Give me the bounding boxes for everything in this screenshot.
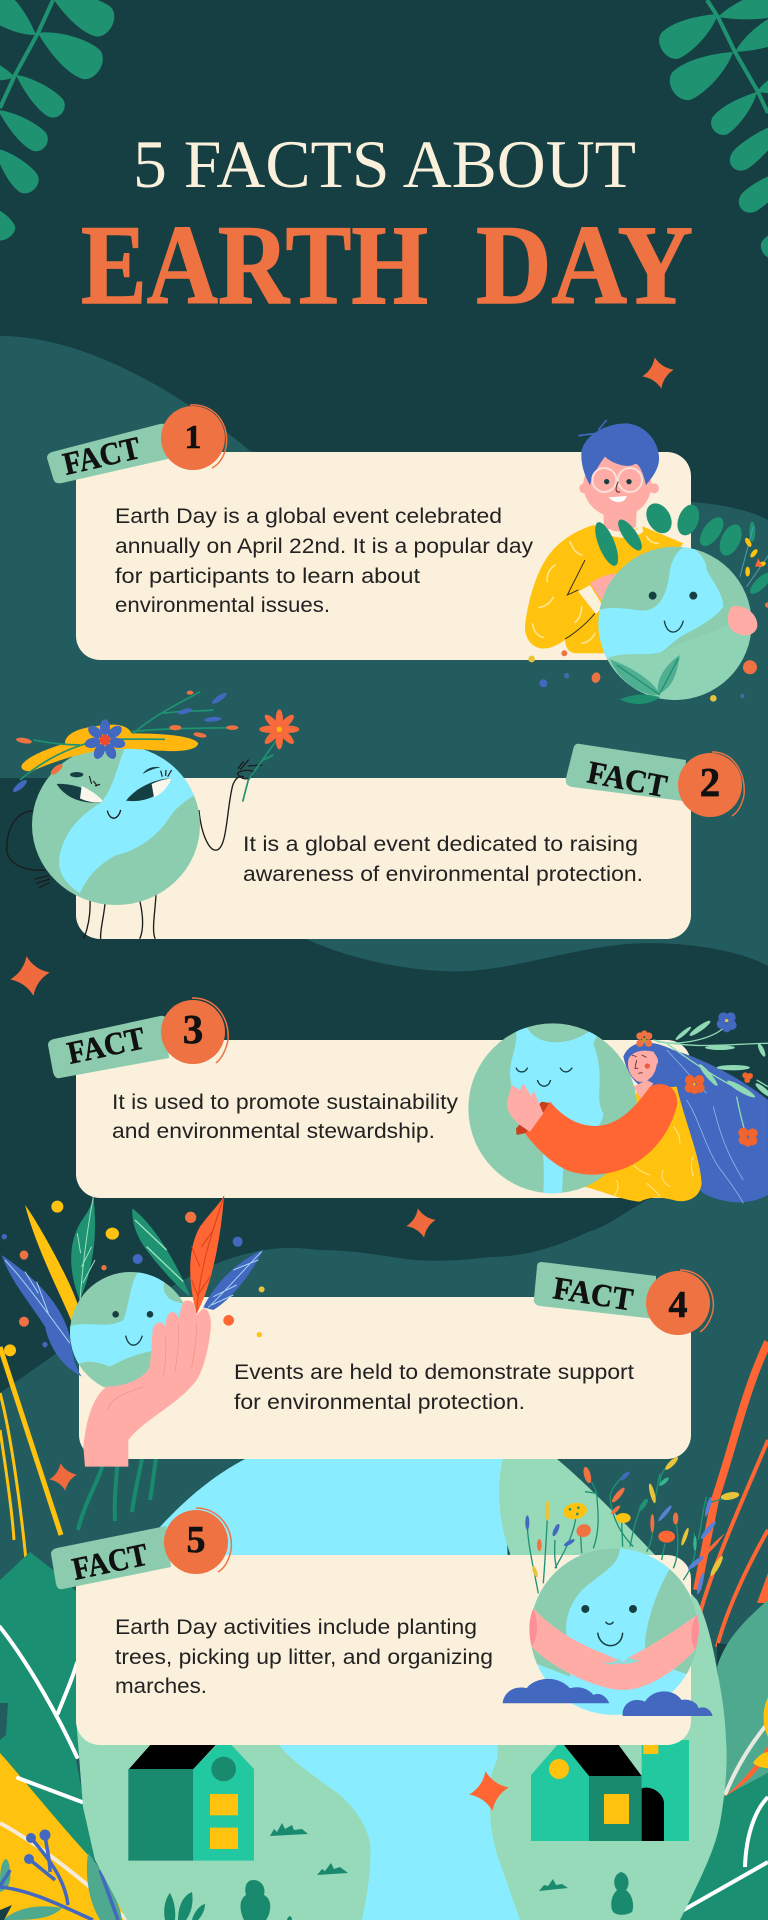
badge: fact 4: [534, 1262, 713, 1335]
badge: fact 5: [51, 1508, 231, 1589]
arms: [530, 1608, 632, 1690]
title line: Earth: EARTH: [81, 203, 428, 328]
arms and legs: [7, 760, 262, 938]
hat flower: [84, 719, 126, 761]
text: fact 3: It is used to promote sustainability: [112, 1091, 459, 1114]
globe: [32, 745, 200, 905]
title line: 5 facts about: 5 FACTS ABOUT: [133, 126, 636, 202]
badge: fact 1: 1: [184, 419, 202, 456]
land: left bank: [77, 1680, 371, 1920]
arm: [516, 1102, 552, 1135]
badge: fact 5: 5: [186, 1519, 206, 1561]
text: fact 1: environmental issues.: [115, 594, 330, 617]
text: fact 4: Events are held to demonstrate support: [234, 1361, 634, 1384]
background leaves: [695, 513, 768, 597]
badge: fact 2: [566, 744, 744, 817]
sprigs: [653, 1028, 768, 1137]
face on globe: [516, 1068, 572, 1086]
title line: Day: DAY: [476, 203, 693, 328]
star 5: [466, 1768, 512, 1814]
text: fact 1: for participants to learn about: [115, 565, 420, 588]
title: [81, 126, 693, 328]
badge: fact 3: FACT: [64, 1019, 148, 1071]
star 2: [7, 953, 53, 999]
text: fact 2: awareness of environmental protection.: [243, 863, 643, 886]
text: fact 5: [115, 1616, 493, 1698]
star 1: [639, 354, 677, 392]
face: [633, 1080, 653, 1100]
neck and collar: [603, 512, 637, 532]
small plants and trees: [164, 1823, 633, 1920]
globe: [598, 547, 752, 700]
badge: fact 1: FACT: [59, 429, 144, 482]
badge: fact 2: FACT: [585, 754, 670, 804]
flower stems: [527, 1465, 730, 1593]
text: fact 3: [112, 1091, 459, 1143]
dots: [528, 656, 535, 662]
hand and cuff: [578, 585, 603, 614]
sprigs: [20, 692, 230, 780]
flowers: [717, 1012, 737, 1032]
text: fact 4: [234, 1361, 634, 1414]
text: fact 2: [243, 833, 643, 886]
badge: fact 4: 4: [668, 1284, 688, 1326]
sweater: [525, 525, 683, 653]
panel: fact 3 card: [76, 1040, 691, 1198]
text: fact 1: [115, 505, 534, 617]
flower on stem: [243, 740, 277, 802]
text: fact 5: marches.: [115, 1675, 207, 1698]
illustration: boy hugging globe: [525, 420, 768, 710]
text: fact 5: trees, picking up litter, and organizing: [115, 1646, 493, 1669]
badge: fact 2: 2: [700, 759, 720, 805]
hair: [623, 1042, 768, 1202]
badge: fact 3: [48, 998, 228, 1078]
text: fact 1: annually on April 22nd. It is a popular day: [115, 535, 534, 558]
hat: [21, 725, 198, 771]
front leaves: [591, 499, 703, 569]
illustration: woman hugging globe: [468, 1012, 768, 1203]
dress: [583, 1087, 702, 1202]
text: fact 1: Earth Day is a global event celebrated: [115, 505, 502, 528]
jungle: bottom left plants: [0, 1347, 156, 1920]
front leaves: [190, 1196, 224, 1313]
house: left: [128, 1743, 254, 1861]
illustration: globe with hat: [7, 691, 299, 938]
hand: [83, 1301, 211, 1467]
right hand: [728, 606, 757, 635]
panel: fact 2 card: [76, 778, 691, 939]
clouds: [503, 1679, 609, 1703]
head: [579, 483, 589, 493]
dots: [51, 1201, 63, 1213]
globe: [468, 1023, 637, 1193]
house: right: [531, 1740, 689, 1841]
badge: fact 4: FACT: [551, 1269, 636, 1317]
text: fact 3: and environmental stewardship.: [112, 1120, 435, 1143]
text: fact 4: for environmental protection.: [234, 1391, 525, 1414]
leaves: [25, 1205, 77, 1322]
jungle: right orange stems: [677, 1342, 768, 1920]
leaves: top right: [653, 0, 768, 263]
globe: [70, 1272, 191, 1393]
badge: fact 1: [47, 405, 227, 483]
illustration: hand holding globe: [2, 1196, 265, 1467]
globe: [530, 1548, 698, 1715]
text: fact 2: It is a global event dedicated to raising: [243, 833, 638, 856]
text: fact 5: Earth Day activities include planting: [115, 1616, 477, 1639]
star 3: [403, 1205, 439, 1241]
illustration: globe hugged with flowers: [503, 1455, 740, 1716]
badge: fact 3: 3: [183, 1006, 203, 1052]
river: [77, 1459, 525, 1920]
eyes: [57, 784, 103, 803]
star 4: [47, 1461, 79, 1493]
globe leaf: [610, 655, 680, 704]
panel: fact 4 card: [79, 1297, 691, 1459]
panel: fact 5 card: [76, 1555, 691, 1745]
badge: fact 5: FACT: [69, 1536, 151, 1587]
panel: fact 1 card: [76, 452, 691, 660]
land: right bank: [489, 1459, 727, 1920]
leaves: top left: [0, 0, 120, 244]
flower heads: [525, 1455, 740, 1595]
eyes, nose and mouth: [581, 1605, 589, 1613]
